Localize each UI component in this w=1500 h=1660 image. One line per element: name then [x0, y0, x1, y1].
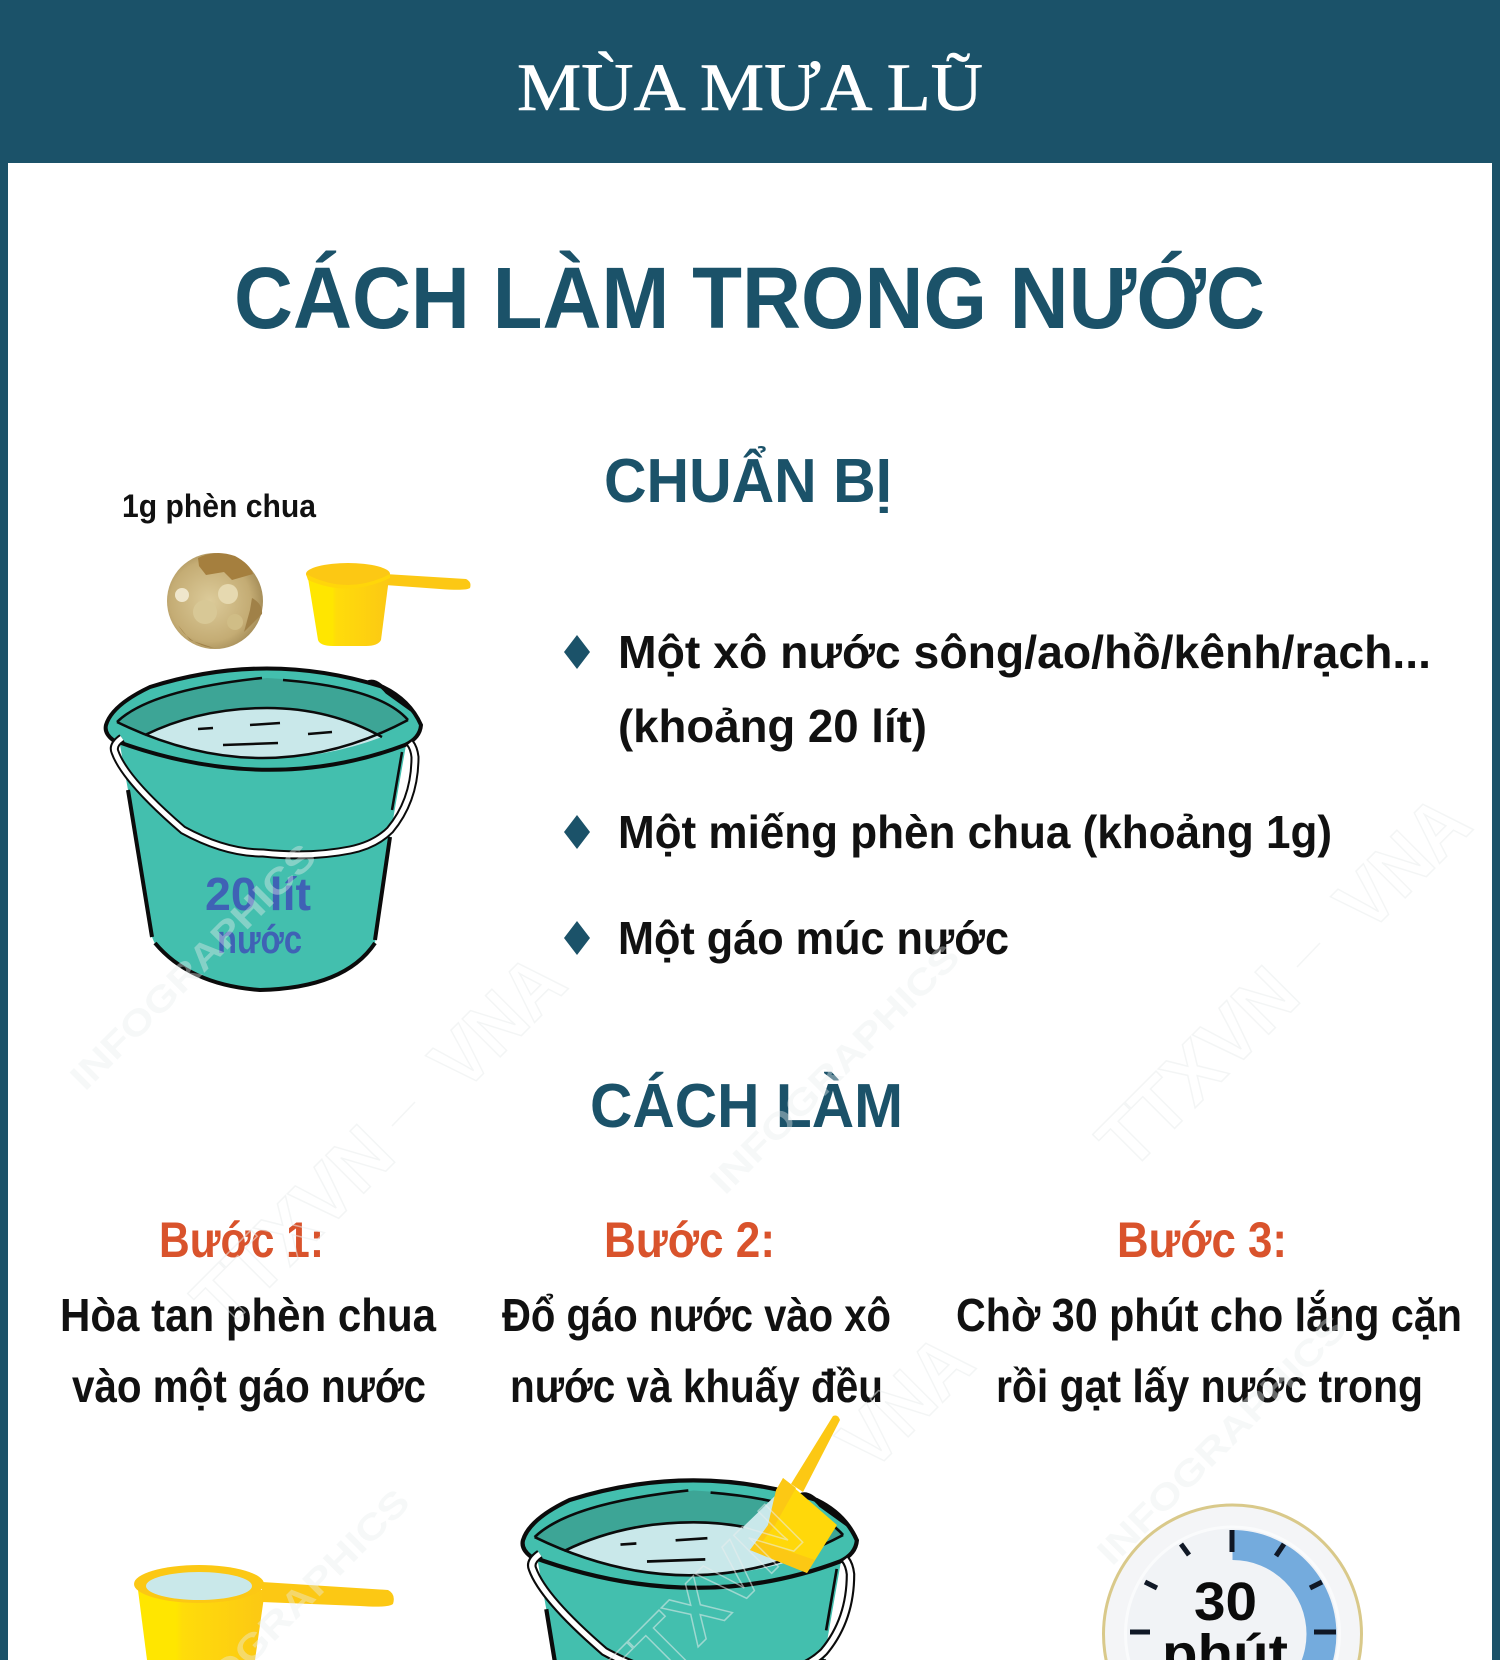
step 3 text [956, 1212, 1462, 1412]
watermarks: TTXVN [175, 1109, 410, 1344]
bullet 1: (khoảng 20 lít) [618, 700, 927, 752]
step 1 text [60, 1212, 436, 1412]
watermarks: INFOGRAPHICS [1089, 1307, 1355, 1573]
step 3 text: Bước 3: [1117, 1212, 1287, 1268]
panel: preparation illustration [106, 488, 471, 990]
step 1 text: Bước 1: [159, 1212, 324, 1268]
step 2 text: Đổ gáo nước vào xô [502, 1289, 891, 1341]
header title: MÙA MƯA LŨ [517, 49, 983, 125]
icon: water bucket [106, 668, 421, 990]
watermarks: VNA [1318, 778, 1487, 947]
heading: preparation: CHUẨN BỊ [604, 447, 892, 516]
step 2 text [502, 1212, 891, 1412]
icon: yellow ladle [306, 563, 470, 646]
bullet 1: Một xô nước sông/ao/hồ/kênh/rạch... [618, 626, 1431, 678]
icon: bucket with ladle pouring [523, 1416, 857, 1660]
alum label: 1g phèn chua [122, 488, 316, 524]
step 2 text: nước và khuấy đều [510, 1360, 883, 1412]
watermarks: VNA [413, 937, 582, 1106]
step 1 text: Hòa tan phèn chua [60, 1289, 436, 1341]
icon: alum ball [167, 553, 263, 649]
step 1 text: vào một gáo nước [72, 1360, 426, 1412]
bullet 1 [564, 626, 1431, 752]
watermarks: VNA [821, 1317, 990, 1486]
bullet 2: Một miếng phèn chua (khoảng 1g) [618, 806, 1332, 858]
icon: ladle with alum water [134, 1565, 394, 1660]
step 3 text: rồi gạt lấy nước trong [996, 1360, 1423, 1412]
watermarks: INFOGRAPHICS [62, 835, 324, 1098]
heading: method: CÁCH LÀM [590, 1072, 903, 1141]
watermarks [62, 778, 1487, 1660]
bullet list [564, 626, 1431, 964]
watermarks: TTXVN [1080, 950, 1315, 1185]
icon: water bucket: nước [217, 918, 302, 962]
clock label: 30 [1194, 1572, 1257, 1632]
step 2 text: Bước 2: [604, 1212, 775, 1268]
bucket label: 20 lít [205, 868, 311, 920]
watermarks: INFOGRAPHICS [702, 936, 968, 1202]
bullet 3: Một gáo múc nước [618, 912, 1009, 964]
icon: 30 minute clock [1104, 1505, 1362, 1660]
main title: CÁCH LÀM TRONG NƯỚC [234, 250, 1265, 347]
